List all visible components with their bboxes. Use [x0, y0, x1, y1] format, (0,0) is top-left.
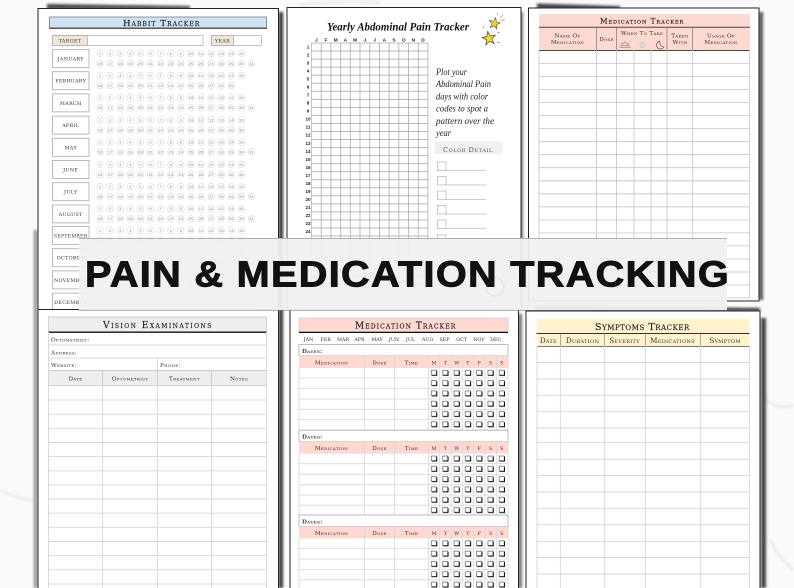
weekly block 2 — [299, 430, 508, 516]
month: October: 1 2 3 4 5 6 7 8 9 — [99, 252, 183, 256]
weekly block 1: Time — [405, 360, 418, 366]
symptoms title and header: Date — [540, 336, 557, 345]
color legend checkboxes — [438, 162, 486, 244]
weekly block 1: Dates: — [302, 349, 323, 355]
month: May: 1 2 3 4 5 6 7 8 9 — [99, 142, 183, 146]
day numbers: 19 — [305, 189, 311, 194]
banner title: PAIN & MEDICATION TRACKING — [85, 254, 730, 294]
day numbers: 23 — [305, 221, 311, 226]
month: March: MARCH — [60, 101, 82, 107]
panel: symptoms tracker — [526, 311, 760, 588]
month: January: 10 11 12 13 14 15 — [188, 53, 244, 57]
day numbers: 10 — [305, 117, 311, 122]
month: May: 16 17 18 19 20 21 22 23 24 25 26 27 28 29 30 31 — [98, 152, 255, 156]
vision table header — [48, 370, 266, 386]
month: January: 1 2 3 4 5 6 7 8 9 — [99, 53, 183, 57]
day numbers: 15 — [305, 157, 311, 162]
instructions: Plot your — [435, 67, 467, 78]
instructions: year — [435, 128, 451, 139]
month: July: 16 17 18 19 20 21 22 23 24 25 26 27 28 29 30 31 — [98, 196, 255, 200]
weekly block 1: Medication — [315, 360, 348, 366]
month: February: 16 17 18 19 20 21 22 23 24 25 26 27 28 29 — [98, 85, 234, 89]
instructions: Abdominal Pain — [435, 79, 491, 90]
month: May — [52, 137, 257, 157]
month: March: 16 17 18 19 20 21 22 23 24 25 26 27 28 29 30 31 — [98, 107, 255, 111]
day numbers: 16 — [305, 165, 311, 170]
month: August: AUGUST — [58, 212, 83, 218]
month: October: 16 17 18 19 20 21 22 23 24 25 26 27 28 29 30 31 — [98, 262, 255, 266]
month: September: SEPTEMBER — [54, 234, 88, 240]
vision table header: Optometrist — [112, 376, 148, 382]
month: November: 1 2 3 4 5 6 7 8 9 — [99, 274, 183, 278]
weekly block 2: MTWTFSS — [432, 446, 503, 452]
month: March: 10 11 12 13 14 15 — [188, 97, 244, 101]
month: February — [52, 71, 246, 91]
day numbers: 6 — [307, 84, 310, 90]
month: May: 10 11 12 13 14 15 — [188, 142, 244, 146]
symptoms title and header: Symptom — [709, 336, 741, 345]
vision table grid — [48, 332, 266, 588]
month: October: OCTOBER — [57, 256, 85, 262]
target and year fields — [52, 36, 262, 46]
month labels: JUN — [388, 337, 399, 343]
day numbers: 24 — [305, 229, 311, 234]
medication table header: Medication Tracker — [600, 16, 684, 26]
vision title — [48, 317, 266, 332]
month: August: 1 2 3 4 5 6 7 8 9 — [99, 208, 183, 212]
month: June: JUNE — [62, 168, 78, 174]
weekly block 3: Dose — [372, 531, 387, 537]
target and year fields: YEAR — [214, 38, 230, 44]
panel: habit tracker — [38, 8, 278, 312]
day numbers: 5 — [307, 76, 310, 82]
month: November: NOVEMBER — [54, 278, 87, 284]
month: June: 16 17 18 19 20 21 22 23 24 25 26 27 28 29 30 — [98, 174, 244, 178]
vision title: Vision Examinations — [102, 320, 212, 331]
medication table header — [539, 14, 750, 50]
month: October: 10 11 12 13 14 15 — [188, 252, 244, 256]
day numbers: 17 — [305, 173, 311, 178]
vision table header: Date — [69, 376, 82, 382]
day numbers: 14 — [305, 149, 311, 154]
target and year fields: TARGET — [59, 38, 82, 44]
month: December — [52, 292, 257, 312]
medication table header: Taken — [671, 34, 689, 40]
medication table header: When To Take — [621, 31, 663, 37]
month: April: 1 2 3 4 5 6 7 8 9 — [99, 119, 183, 123]
instructions: codes to spot a — [436, 104, 488, 114]
month: July: JULY — [63, 190, 78, 196]
month: June: 1 2 3 4 5 6 7 8 9 — [99, 164, 183, 168]
panel: yearly abdominal pain tracker — [287, 8, 521, 310]
medication table header: Name Of — [554, 34, 581, 40]
month: January: JANUARY — [57, 56, 84, 62]
color detail heading: Color Detail — [443, 146, 493, 154]
contact fields: Address: — [50, 350, 77, 356]
weekly block 3 — [299, 515, 508, 588]
month labels: AUG — [421, 337, 434, 343]
month: February: 10 11 12 13 14 15 — [188, 75, 244, 79]
medication table header: With — [673, 40, 688, 46]
month: September: 1 2 3 4 5 6 7 8 9 — [99, 230, 183, 234]
banner — [79, 238, 730, 310]
month: July: 10 11 12 13 14 15 — [188, 186, 244, 190]
contact fields: Phone: — [160, 363, 181, 369]
medication table header: Medication — [551, 40, 584, 46]
vision table header: Treatment — [169, 376, 200, 382]
medication table header: Usage Of — [707, 34, 735, 40]
weekly tracker title: Medication Tracker — [355, 322, 456, 332]
month labels: MAR — [337, 337, 349, 343]
month: September: 16 17 18 19 20 21 22 23 24 25 26 27 28 29 30 — [98, 240, 244, 244]
month: January — [52, 48, 257, 68]
month: June — [52, 159, 246, 179]
medication table grid — [539, 50, 750, 298]
day numbers: 3 — [307, 60, 310, 65]
day numbers: 11 — [306, 125, 311, 130]
weekly block 3: Time — [405, 531, 418, 537]
weekly block 2: Medication — [315, 446, 348, 452]
month labels: FEB — [321, 337, 331, 343]
day numbers: 20 — [305, 197, 311, 202]
day numbers: 9 — [307, 109, 310, 114]
symptoms title and header — [536, 319, 750, 346]
day numbers: 4 — [307, 68, 310, 73]
medication table header: Medication — [704, 40, 738, 46]
day numbers: 2 — [307, 52, 310, 57]
month: February: FEBRUARY — [55, 79, 87, 85]
month: August: 16 17 18 19 20 21 22 23 24 25 26 27 28 29 30 31 — [98, 218, 255, 222]
month labels: OCT — [456, 337, 468, 343]
symptoms title and header: Medications — [650, 336, 695, 345]
month labels: SEP — [439, 337, 450, 343]
month: November — [52, 270, 246, 290]
month: January: 16 17 18 19 20 21 22 23 24 25 26 27 28 29 30 31 — [98, 63, 255, 67]
vision table header: Notes — [230, 376, 248, 382]
contact fields: Optometrist: — [51, 338, 89, 344]
month: July — [52, 182, 257, 202]
icon: stars — [481, 13, 505, 45]
month: April: 16 17 18 19 20 21 22 23 24 25 26 27 28 29 30 — [98, 129, 244, 133]
weekly block 1 — [299, 344, 508, 430]
weekly block 3: Dates: — [302, 520, 323, 526]
day numbers: 18 — [305, 181, 311, 186]
month: March — [52, 93, 257, 113]
day numbers: 8 — [307, 101, 310, 106]
yearly tracker title: Yearly Abdominal Pain Tracker — [327, 22, 469, 34]
instructions: days with color — [436, 92, 488, 102]
month: December: 1 2 3 4 5 6 7 8 9 — [99, 296, 183, 300]
month: April — [52, 115, 246, 135]
month: November: 10 11 12 13 14 15 — [188, 274, 244, 278]
instructions: pattern over the — [435, 116, 495, 127]
month: August — [52, 204, 257, 224]
month letters: JFMAMJJASOND — [315, 38, 425, 44]
month labels: DEC — [490, 337, 502, 343]
habit tracker title — [49, 17, 267, 29]
month: April: APRIL — [61, 123, 80, 129]
icons: sunrise, sun, moon — [619, 41, 664, 49]
month: December: 16 17 18 19 20 21 22 23 24 25 26 27 28 29 30 31 — [98, 306, 255, 310]
month: February: 1 2 3 4 5 6 7 8 9 — [99, 75, 183, 79]
weekly block 2: Dates: — [302, 435, 323, 441]
weekly block 2: Time — [405, 446, 418, 452]
day numbers: 22 — [305, 213, 311, 218]
month: September — [52, 225, 246, 245]
pain calendar grid — [311, 43, 428, 292]
month: December: 10 11 12 13 14 15 — [188, 296, 244, 300]
symptoms title and header: Duration — [566, 336, 599, 345]
contact fields — [48, 338, 266, 370]
medication table header: Dose — [599, 37, 614, 43]
weekly block 1: MTWTFSS — [432, 360, 503, 366]
month labels: JAN — [303, 337, 313, 343]
habit tracker title: Habbit Tracker — [123, 19, 200, 29]
color detail heading — [434, 142, 502, 154]
panel: vision examinations — [38, 310, 278, 588]
month: June: 10 11 12 13 14 15 — [188, 164, 244, 168]
weekly block 1: Dose — [372, 360, 387, 366]
weekly tracker title — [299, 318, 508, 332]
month labels: NOV — [473, 337, 485, 343]
month labels: APR — [353, 337, 365, 343]
month: September: 10 11 12 13 14 15 — [188, 230, 244, 234]
weekly block 2: Dose — [372, 446, 387, 452]
month: March: 1 2 3 4 5 6 7 8 9 — [99, 97, 183, 101]
month: October — [52, 248, 257, 268]
instructions — [435, 67, 495, 139]
month: December: DECEMBER — [54, 300, 87, 306]
month: April: 10 11 12 13 14 15 — [188, 119, 244, 123]
day numbers: 13 — [305, 141, 311, 146]
month labels: JUL — [405, 337, 416, 343]
panel: medication tracker weekly — [290, 310, 518, 588]
month: November: 16 17 18 19 20 21 22 23 24 25 26 27 28 29 30 — [98, 284, 244, 288]
weekly block 3: MTWTFSS — [432, 531, 503, 537]
month: August: 10 11 12 13 14 15 — [188, 208, 244, 212]
day numbers: 7 — [307, 92, 310, 98]
contact fields: Website: — [51, 363, 77, 369]
day numbers: 1 — [307, 44, 310, 49]
month labels: MAY — [371, 337, 384, 343]
symptoms title and header: Symptoms Tracker — [595, 322, 690, 333]
panel: medication tracker top — [528, 8, 759, 301]
day numbers: 12 — [305, 133, 311, 138]
weekly block 3: Medication — [315, 531, 348, 537]
month: May: MAY — [64, 145, 77, 151]
symptoms title and header: Severity — [609, 336, 640, 345]
month: July: 1 2 3 4 5 6 7 8 9 — [99, 186, 183, 190]
symptoms table grid — [536, 346, 750, 588]
day numbers: 21 — [305, 205, 311, 210]
